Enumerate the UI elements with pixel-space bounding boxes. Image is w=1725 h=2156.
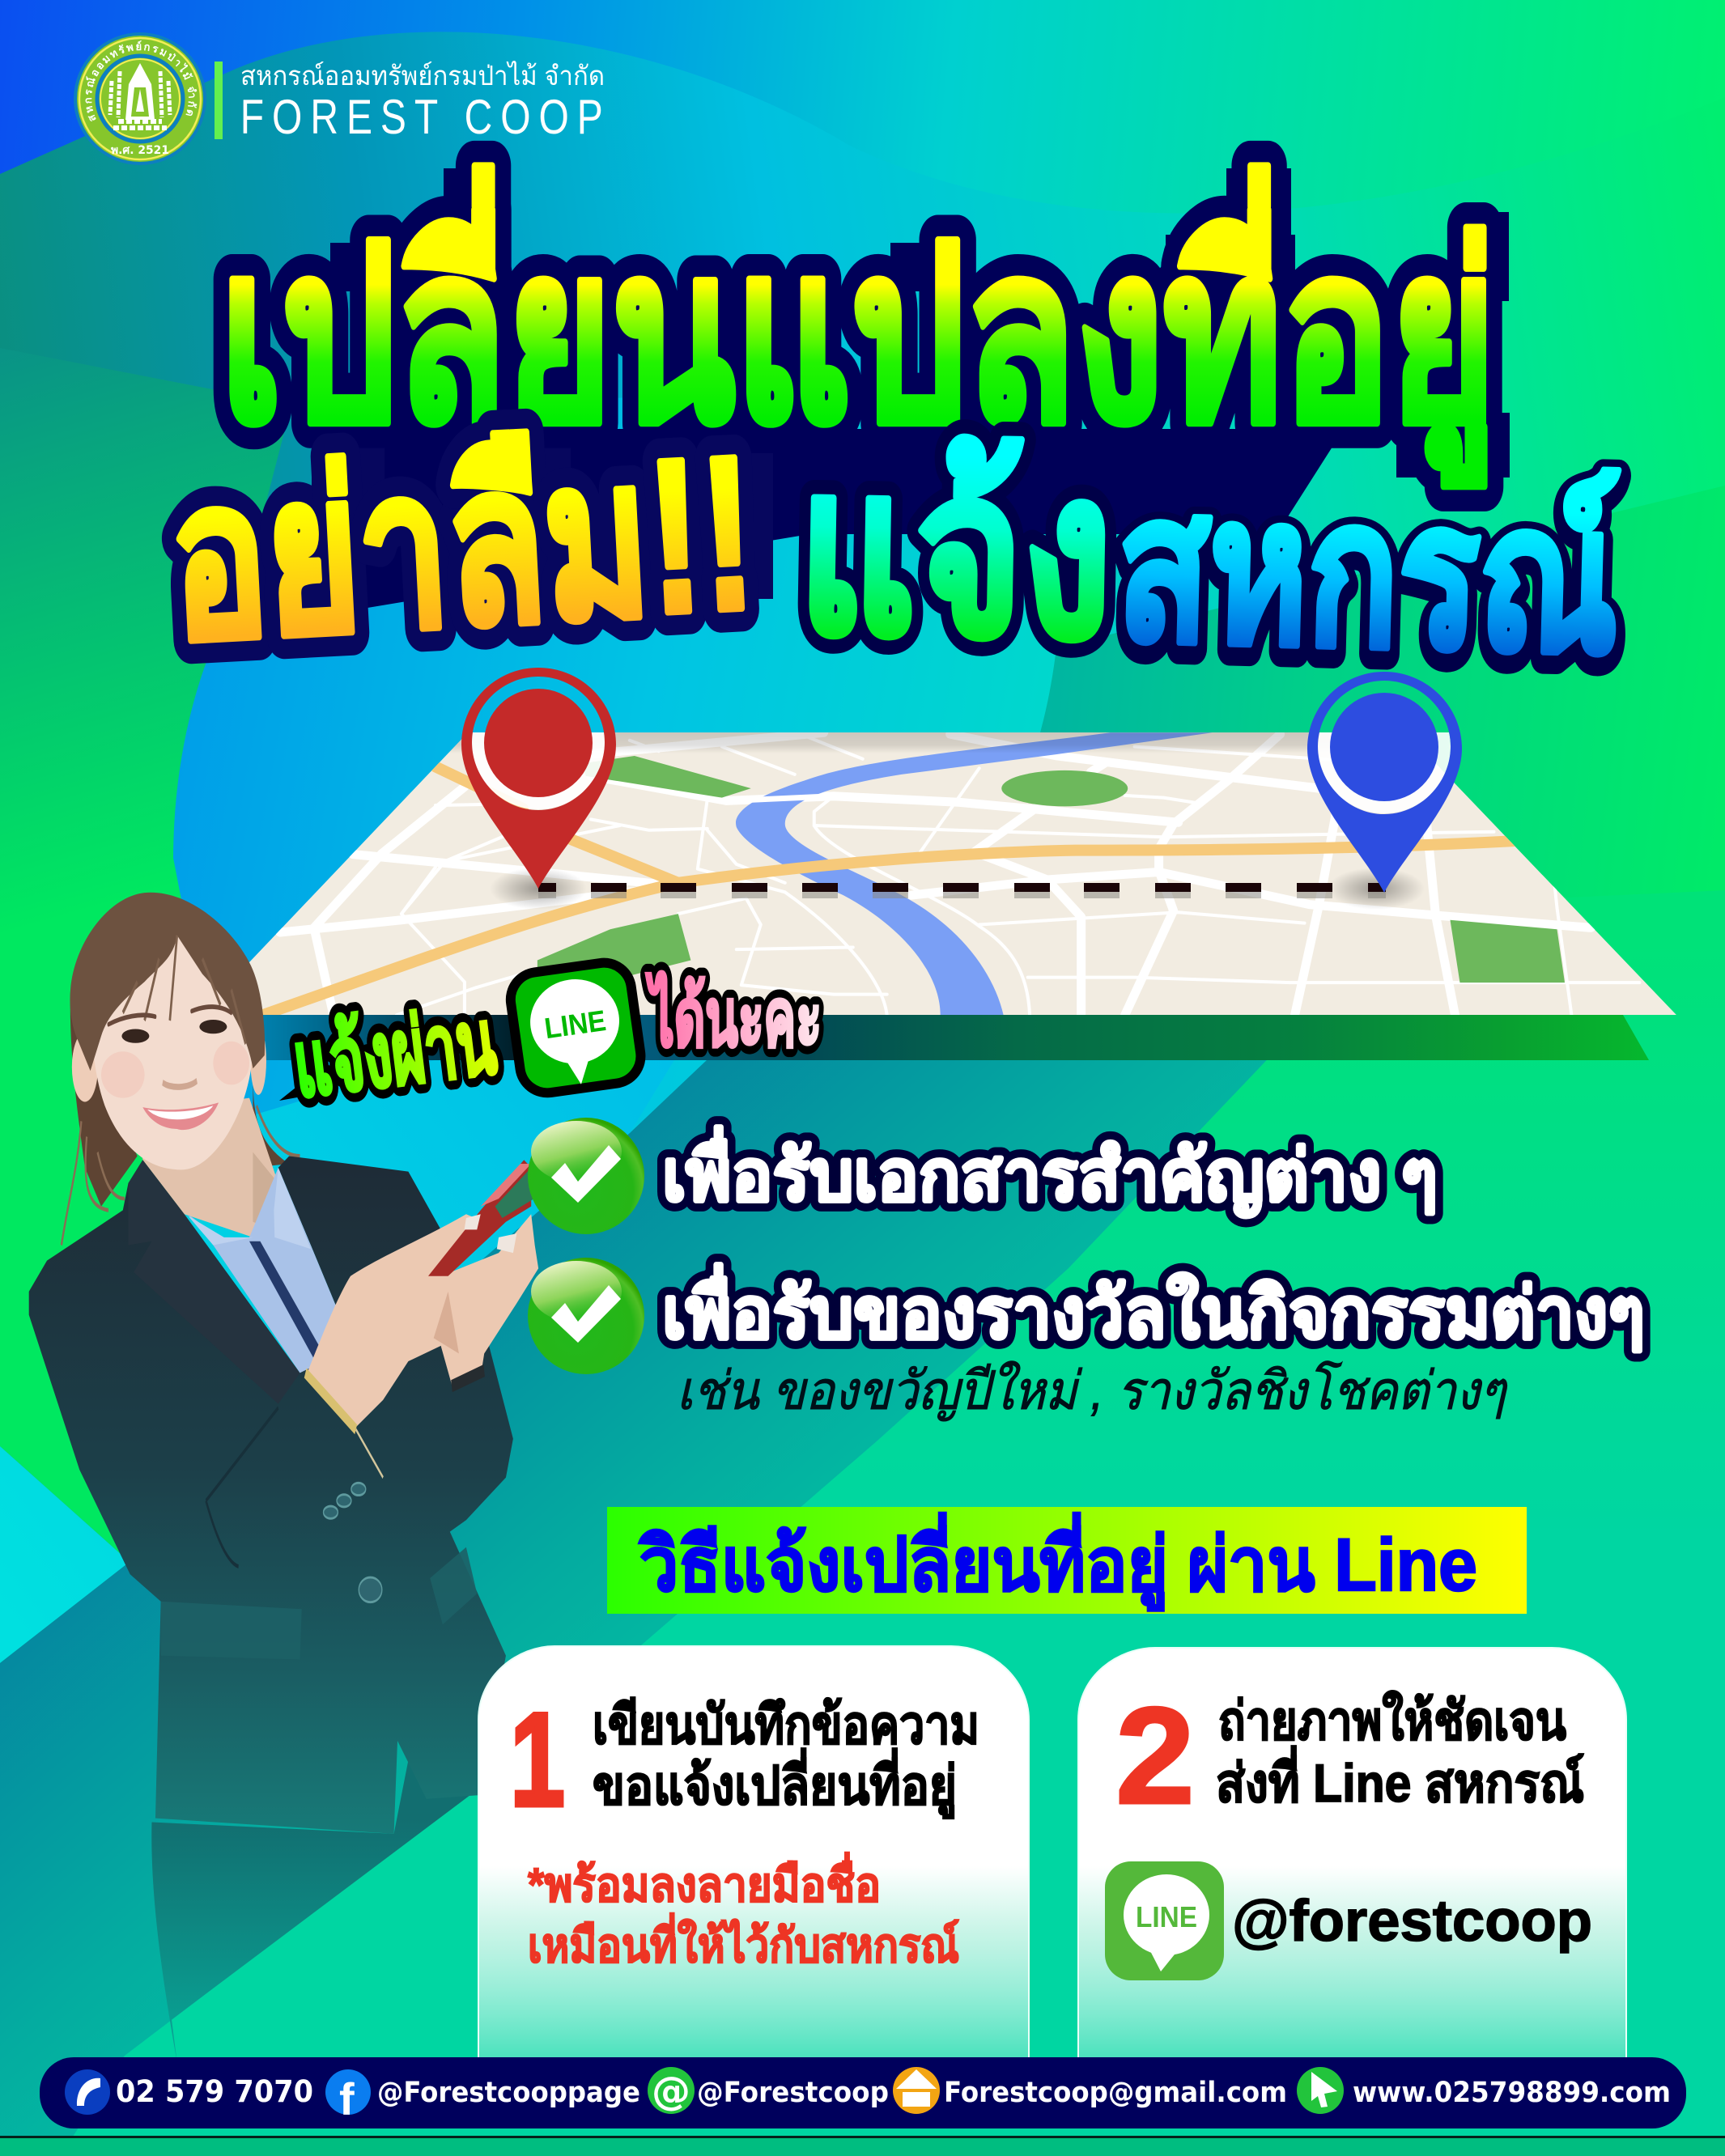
organisation name: FOREST COOP (240, 90, 603, 144)
shirt (188, 1168, 340, 1373)
map shadow (199, 1015, 1649, 1060)
skirt (151, 1760, 481, 2062)
step 1 text: เขียนบันทึกข้อความ (593, 1695, 979, 1755)
LINE handle: @forestcoop (1232, 1889, 1592, 1954)
sticker: can do: ได้นะคะ (646, 972, 822, 1063)
icon: facebook (325, 2069, 371, 2124)
icon: mail house (893, 2067, 940, 2114)
benefit 2: เพื่อรับของรางวัลในกิจกรรมต่างๆ (662, 1263, 1645, 1353)
icon: LINE logo (1105, 1861, 1224, 1980)
title line 2: do not forget: อย่าลืม!! (165, 411, 760, 685)
icon: facebook: f (339, 2073, 355, 2124)
step 1 note: *พร้อมลงลายมือชื่อ (528, 1852, 881, 1912)
benefit 1: เพื่อรับเอกสารสำคัญต่าง ๆ (662, 1126, 1438, 1219)
thin streets (397, 736, 1639, 1015)
title line 2: notify (797, 422, 1621, 699)
icon: red location pin (461, 668, 616, 889)
icon: LINE logo: LINE (1136, 1900, 1197, 1933)
sticker: can do: ได้นะคะ (646, 972, 822, 1063)
icon: LINE sticker (507, 959, 644, 1097)
line id: @Forestcoop (697, 2077, 889, 2109)
ponytail and back hair (70, 990, 289, 1207)
website: www.025798899.com (1353, 2077, 1671, 2109)
phone number: 02 579 7070 (116, 2074, 313, 2109)
organisation name: สหกรณ์ออมทรัพย์กรมป่าไม้ จำกัด (240, 61, 605, 91)
benefit 2 detail: เช่น ของขวัญปีใหม่ , รางวัลชิงโชคต่างๆ (677, 1360, 1507, 1422)
sticker: notify via: แจ้งผ่าน (288, 991, 501, 1116)
ears (72, 1032, 98, 1101)
jacket (29, 1156, 513, 1834)
icon: web cursor (1297, 2067, 1344, 2114)
nose (163, 1081, 197, 1087)
parks (537, 756, 1565, 983)
panel: step 1 (478, 1646, 1029, 2104)
icon: line at: @ (652, 2069, 690, 2114)
email: Forestcoop@gmail.com (944, 2077, 1287, 2109)
sticker: notify via (279, 991, 501, 1116)
title line 2: notify: แจ้ง (797, 422, 1114, 685)
title line 2: do not forget: อย่าลืม!! (165, 411, 760, 685)
banner: how to notify: วิธีแจ้งเปลี่ยนที่อยู่ ผ่าน Line (639, 1512, 1477, 1611)
orange highway (262, 766, 1513, 1015)
panel: step 2: ส่งที่ Line สหกรณ์ (1216, 1745, 1584, 1813)
step 2 text: ถ่ายภาพให้ชัดเจน (1218, 1689, 1566, 1751)
benefit 1: เพื่อรับเอกสารสำคัญต่าง ๆ (662, 1126, 1438, 1219)
step number 2: 2 (1115, 1679, 1195, 1833)
watch and bracelet (452, 1371, 484, 1386)
main streets (280, 732, 1591, 1015)
icon: check 1 (528, 1118, 644, 1234)
route dashes (490, 868, 1425, 910)
sticker: can do (646, 972, 822, 1063)
eyes (108, 1007, 232, 1025)
benefit 2: เพื่อรับของรางวัลในกิจกรรมต่างๆ (662, 1263, 1645, 1353)
logo: Forest Coop seal: พ.ศ. 2521 (111, 144, 169, 157)
hands (307, 1214, 538, 1427)
step number 1: 1 (510, 1685, 565, 1834)
jacket lapels and pockets (128, 1160, 300, 1404)
icon: blue location pin (1307, 672, 1462, 893)
sticker: notify via: แจ้งผ่าน (288, 991, 501, 1116)
face (91, 934, 253, 1169)
organisation name (240, 61, 605, 144)
panel: step 2 (1078, 1648, 1626, 2104)
panel: step 1: เหมือนที่ให้ไว้กับสหกรณ์ (528, 1912, 959, 1972)
title line 2: notify: แจ้ง (797, 422, 1114, 685)
logo: Forest Coop seal: สหกรณ์ออมทรัพย์กรมป่าไม้ จำกัด (86, 40, 198, 121)
divider bar next to logo (215, 62, 223, 139)
icon: phone (65, 2069, 110, 2115)
title backing shapes (312, 168, 1510, 615)
neck and chest (134, 1098, 278, 1237)
title line 2: do not forget (165, 411, 760, 685)
logo: Forest Coop seal (74, 32, 206, 165)
smile (142, 1102, 219, 1130)
woman holding phone (29, 893, 538, 2062)
buttons (324, 1483, 382, 1602)
icon: check 2 (528, 1258, 644, 1374)
map (162, 732, 1700, 1015)
panel: step 1: ขอแจ้งเปลี่ยนที่อยู่ (593, 1747, 957, 1819)
blush (101, 1051, 145, 1098)
phone (428, 1160, 531, 1276)
facebook page: @Forestcooppage (377, 2077, 640, 2109)
icon: LINE sticker: LINE (542, 1004, 608, 1045)
fringe (70, 893, 265, 1071)
river (736, 732, 1213, 1015)
footer contact bar (40, 2057, 1686, 2128)
